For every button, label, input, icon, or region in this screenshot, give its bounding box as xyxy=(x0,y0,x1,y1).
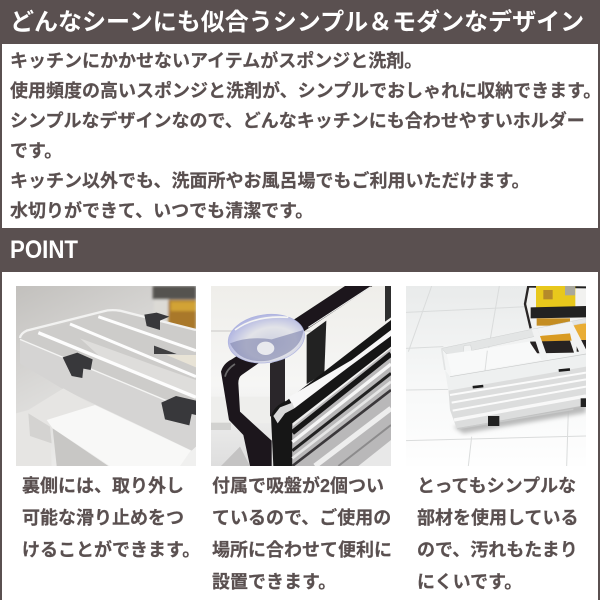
caption: suction cups xyxy=(212,476,392,592)
text block: product description: 水切りができて、いつでも清潔です。 xyxy=(10,201,313,221)
caption: non-slip feet: 裏側には、取り外し xyxy=(22,476,184,496)
photo: black holder with suction cup xyxy=(211,286,391,466)
heading: POINT bar xyxy=(0,228,600,272)
heading: design title bar: どんなシーンにも似合うシンプル＆モダンなデザイン xyxy=(10,9,584,36)
photo: white holder on white tile xyxy=(406,286,586,466)
caption: suction cups: 付属で吸盤が2個つい xyxy=(212,476,384,496)
icon: suction cup xyxy=(225,310,308,368)
text block: product description xyxy=(10,50,600,221)
caption: suction cups: 場所に合わせて便利に xyxy=(212,540,392,560)
caption: non-slip feet: けることができます。 xyxy=(22,540,200,560)
caption: simple materials xyxy=(417,476,578,592)
text block: product description: です。 xyxy=(10,141,62,161)
photo: white holder underside with non-slip feet xyxy=(16,286,196,466)
caption: simple materials: ので、汚れもたまり xyxy=(417,540,578,560)
caption: simple materials: にくいです。 xyxy=(417,572,522,592)
text block: product description: キッチンにかかせないアイテムがスポンジと洗剤。 xyxy=(10,51,422,71)
caption: simple materials: とってもシンプルな xyxy=(417,476,576,496)
text block: product description: シンプルなデザインなので、どんなキッチンにも合わせやすいホルダー xyxy=(10,111,585,131)
text block: product description: 使用頻度の高いスポンジと洗剤が、シンプルでおしゃれに収納できます。 xyxy=(10,81,600,101)
caption: non-slip feet: 可能な滑り止めをつ xyxy=(22,508,184,528)
heading: POINT bar: POINT xyxy=(10,236,78,264)
text block: product description: キッチン以外でも、洗面所やお風呂場でもご利用いただけます。 xyxy=(10,171,530,191)
caption: suction cups: 設置できます。 xyxy=(212,572,336,592)
heading: design title bar xyxy=(0,0,600,44)
caption: suction cups: ているので、ご使用の xyxy=(212,508,391,528)
caption: non-slip feet xyxy=(22,476,200,560)
caption: simple materials: 部材を使用している xyxy=(417,508,578,528)
